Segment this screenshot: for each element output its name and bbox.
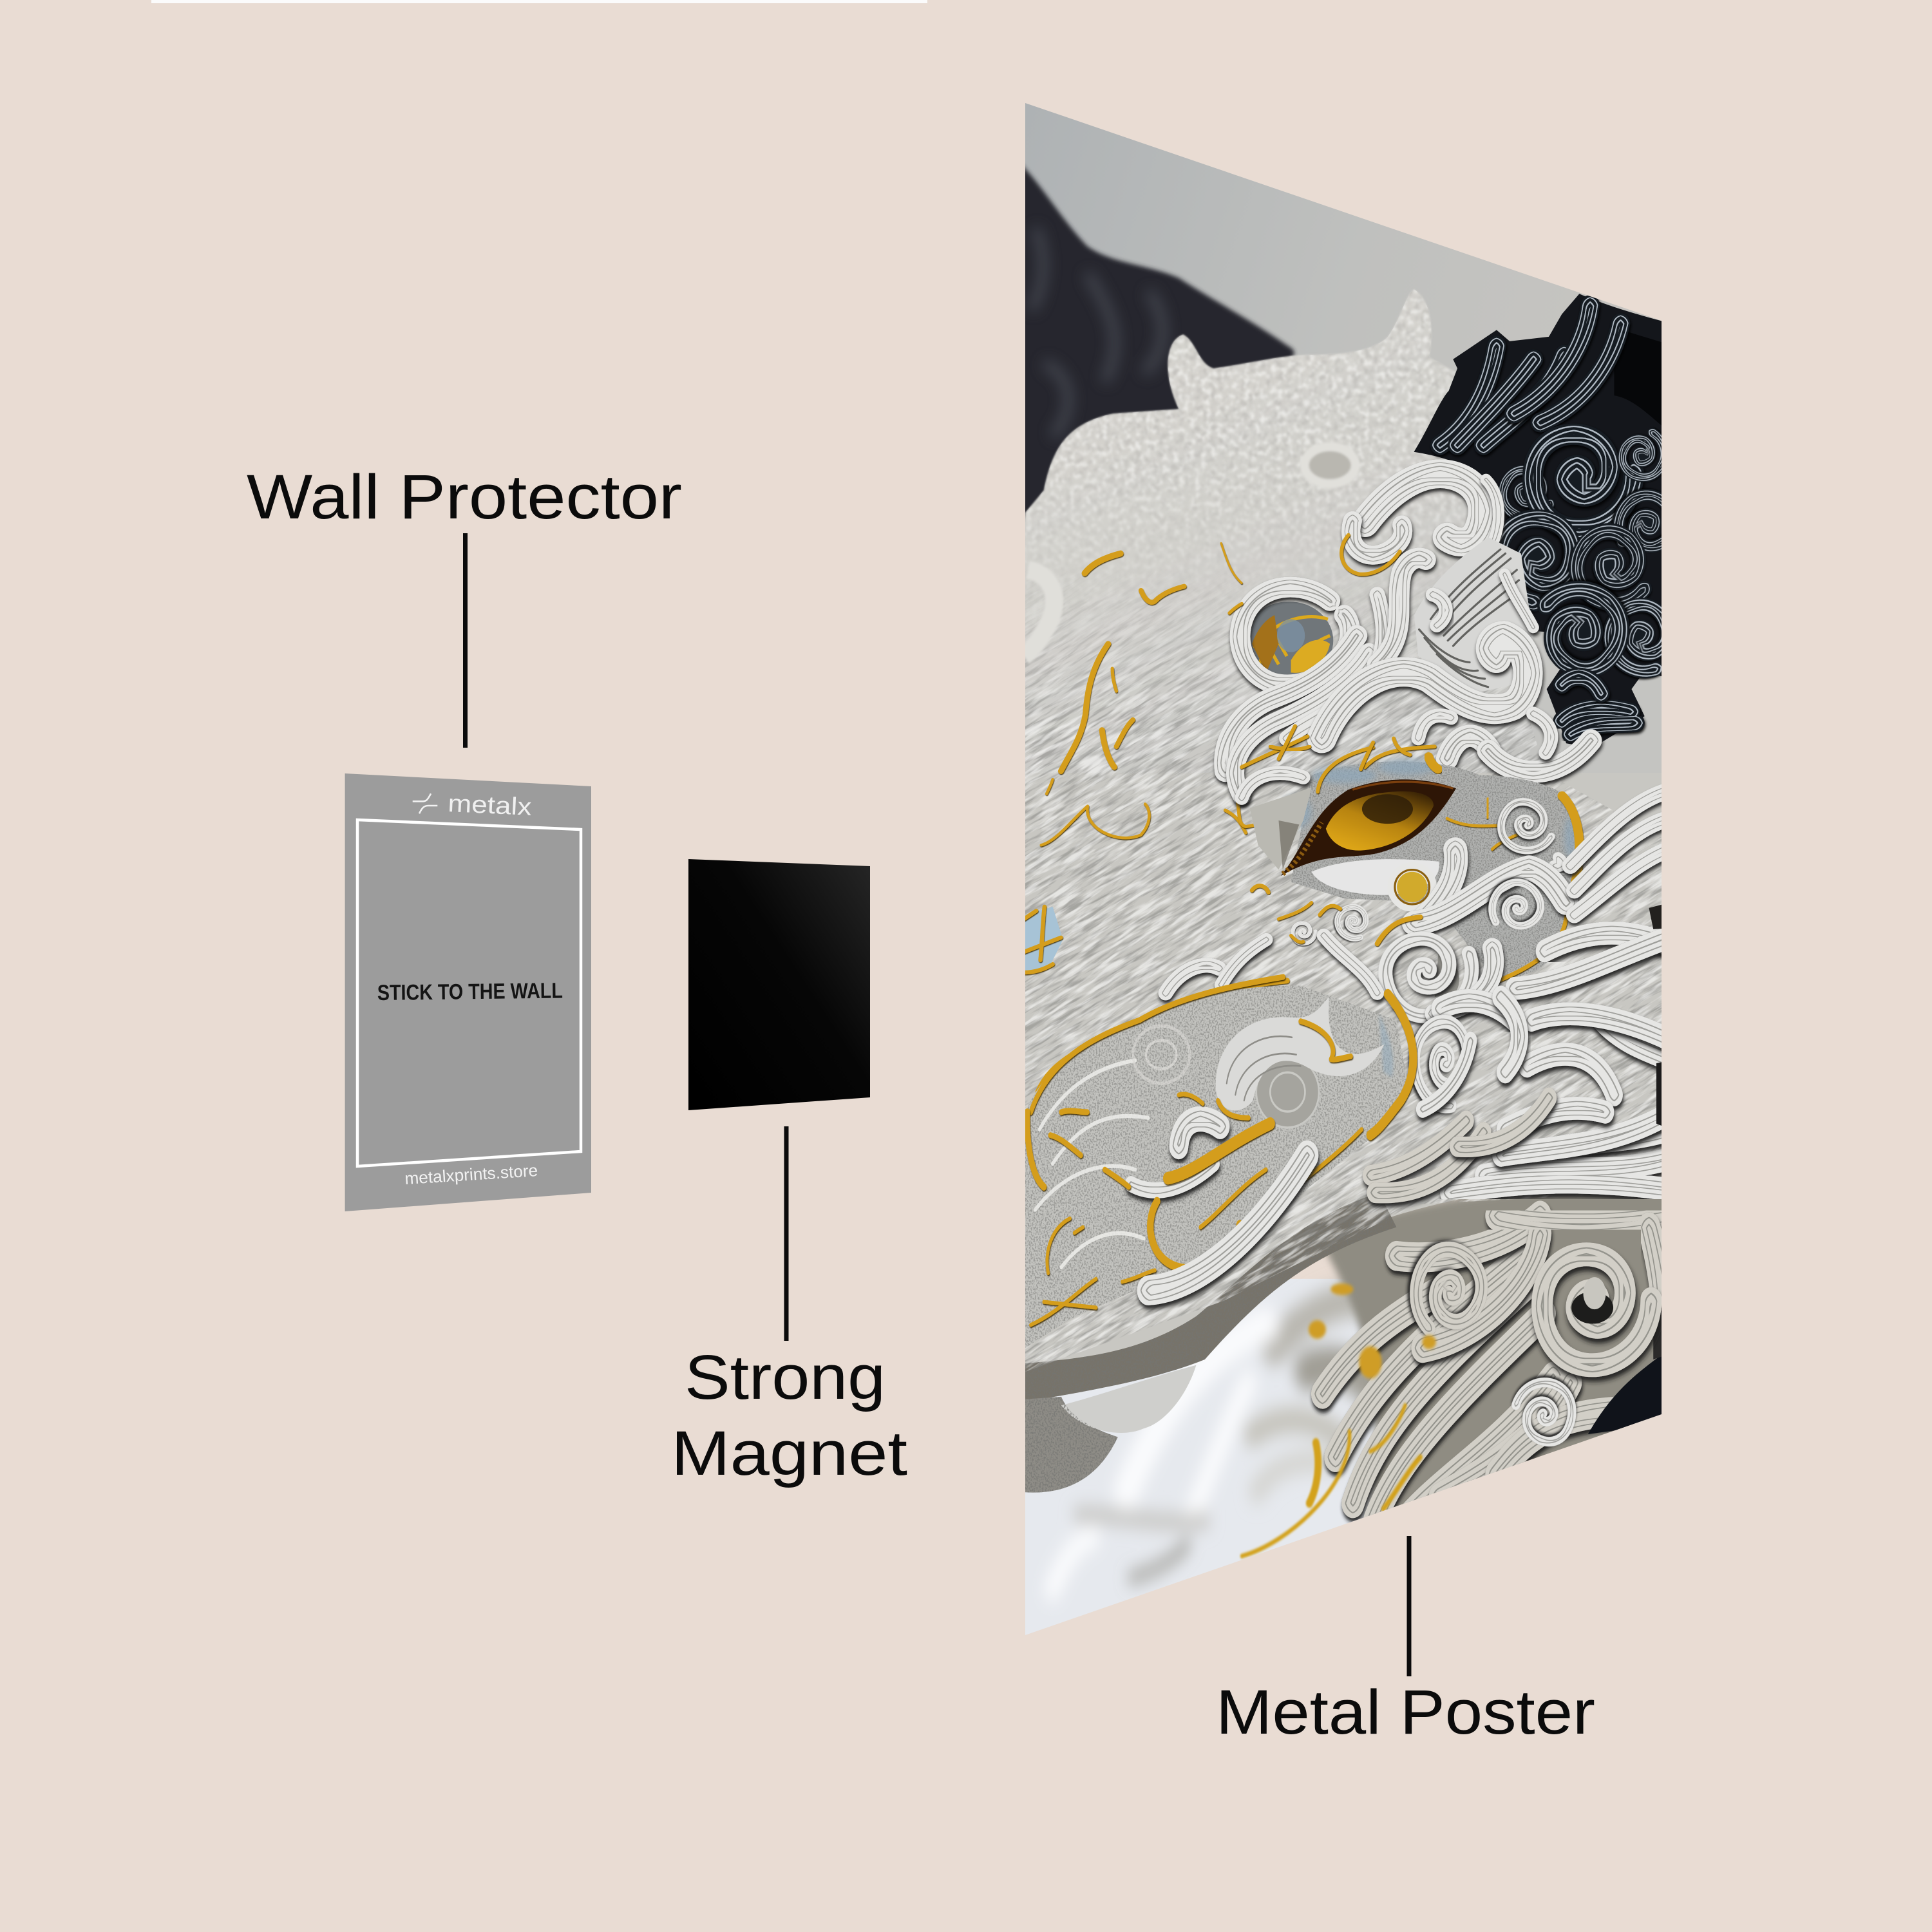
blue speckle: [1278, 759, 1576, 857]
logo icon: [413, 793, 437, 813]
black curled mane at top right: [1414, 294, 1688, 748]
white placement frame: [357, 820, 581, 1166]
small white curls above muzzle: [1166, 965, 1219, 993]
small ribbon left of eye: [1242, 773, 1303, 798]
nostril swirl: [1216, 997, 1384, 1111]
blurred dark mane at top left: [1018, 160, 1294, 517]
muzzle and snout details: [1022, 902, 1671, 1348]
gold speckle arc: [1562, 796, 1579, 886]
curls under cheek: [1440, 1001, 1514, 1020]
striped feather region: [1414, 537, 1533, 693]
white curl at gold scroll: [1179, 1119, 1220, 1146]
panel: wall protector sheet: [345, 773, 591, 1211]
gold long arc on muzzle: [1038, 981, 1287, 1092]
poster background: [1025, 103, 1662, 531]
right side mane strands: [1570, 791, 1669, 915]
decorative top white strip: [151, 0, 927, 3]
label: strong magnet: Strong: [685, 1342, 886, 1412]
instruction text: STICK TO THE WALL: [377, 978, 563, 1005]
gold scroll: [1168, 1124, 1270, 1179]
leader line: wall protector: [463, 533, 468, 748]
label: metal poster: Metal Poster: [1216, 1677, 1595, 1747]
top swirl and crescent: [1305, 447, 1356, 484]
label: wall protector: Wall Protector: [247, 462, 682, 532]
strong magnet: [688, 859, 870, 1110]
blurred gold flecks: [1309, 1283, 1436, 1378]
label: strong magnet: Magnet: [671, 1418, 907, 1488]
blurred white foreground at bottom: [1018, 1279, 1497, 1681]
beaded gold cheek line: [1370, 994, 1413, 1135]
logo wordmark: metalx: [448, 790, 532, 821]
small ribbon on cheek edge: [1423, 1040, 1470, 1109]
gold disk: [1391, 866, 1434, 909]
right side strands lower: [1449, 933, 1671, 1193]
spirals around face: [1492, 794, 1560, 860]
dragon eye: [1281, 779, 1456, 876]
concentric nostril: [1256, 1056, 1319, 1128]
ribbons beneath ring: [1225, 636, 1357, 771]
label: strong magnet: [671, 1342, 907, 1488]
gold and blue cheek mark: [1024, 907, 1063, 974]
snout textured plate: [1025, 985, 1410, 1348]
gold accents by spirals: [1378, 917, 1420, 943]
bright gold fragments on left: [1041, 544, 1242, 845]
panel: metal poster artwork: [1025, 103, 1662, 1635]
big wave ribbon: [1321, 636, 1528, 738]
sculpted head details around the eye: [1024, 447, 1669, 1092]
left blurred ring: [1024, 570, 1054, 656]
gold socket ring: [1244, 601, 1333, 679]
round carved curl: [1133, 1026, 1189, 1083]
lower right mane swirls: [1242, 1170, 1684, 1556]
leader line: magnet: [784, 1126, 788, 1341]
store url: metalxprints.store: [404, 1160, 538, 1188]
white patch below eye: [1311, 859, 1439, 895]
fur texture overlay: [465, 14, 1932, 1932]
out of focus forehead texture: [1005, 278, 1571, 730]
textured face grey around eye: [1291, 761, 1579, 978]
leader line: poster: [1406, 1536, 1412, 1676]
white ribbon on snout: [1148, 1155, 1307, 1291]
lower lip tufts: [1005, 1187, 1405, 1509]
main head base: [1005, 289, 1684, 1509]
jaw band: [1005, 1193, 1396, 1405]
gold filigree above eye: [1226, 726, 1438, 833]
